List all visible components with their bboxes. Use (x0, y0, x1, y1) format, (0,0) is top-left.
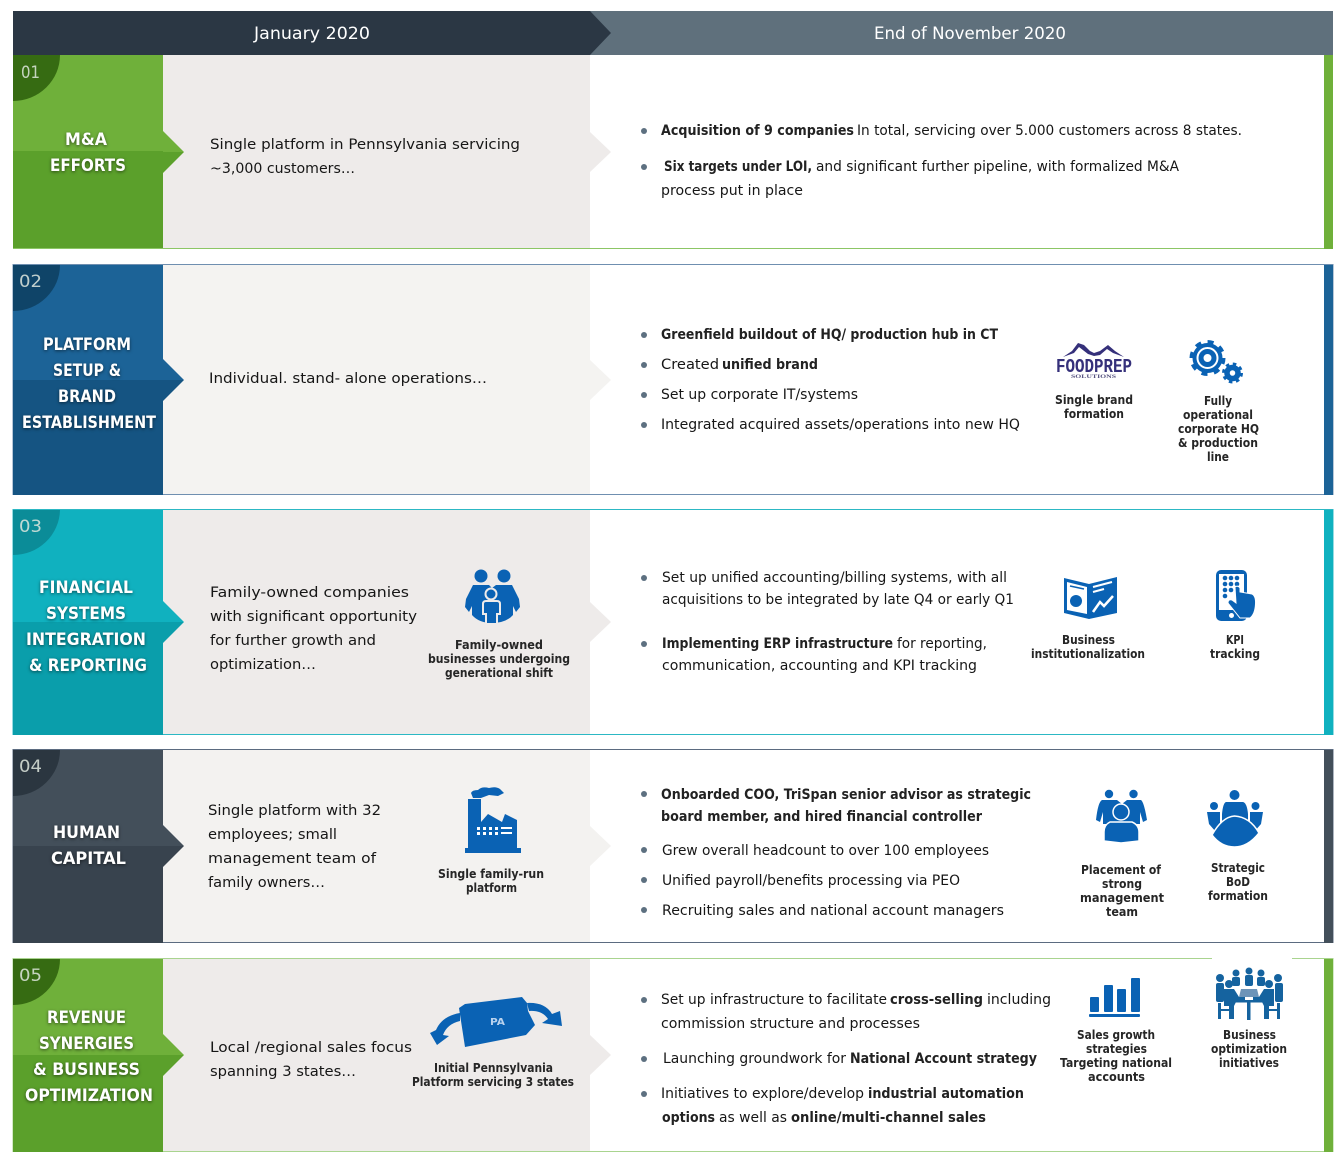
November bullets: Created (661, 356, 719, 373)
January panel: Individual. stand- alone operations… (209, 370, 487, 387)
caption: family-owned businesses: generational shift (445, 665, 553, 680)
caption: initial Pennsylvania platform: Platform servicing 3 states (412, 1074, 574, 1089)
caption: initial Pennsylvania platform: Initial Pennsylvania (434, 1060, 553, 1075)
January panel: family owners… (208, 874, 325, 891)
January panel: Single platform with 32 (208, 802, 381, 819)
row 01: M&A efforts (13, 55, 1333, 249)
caption: sales growth strategies (1060, 1027, 1172, 1084)
caption: placement of strong management team: management (1080, 890, 1164, 905)
January panel: Family-owned companies (210, 584, 409, 601)
label block: CAPITAL (51, 849, 126, 869)
November bullets: Implementing ERP infrastructure (662, 635, 893, 652)
caption: single brand formation (1055, 392, 1133, 421)
caption: placement of strong management team (1080, 862, 1164, 919)
icon: family (465, 570, 520, 624)
caption: family-owned businesses: Family-owned (455, 637, 543, 652)
January panel: management team of (208, 850, 377, 867)
caption: business optimization initiatives: optimization (1211, 1041, 1287, 1056)
November bullets: Greenfield buildout of HQ/ production hub in CT (661, 326, 998, 343)
January panel (163, 55, 611, 248)
icon: business report (1064, 577, 1117, 619)
icon: Pennsylvania map with arrows (430, 997, 562, 1047)
icon: FoodPrep logo: FOODPREP (1056, 356, 1132, 378)
January panel: for further growth and (210, 632, 376, 649)
January panel: Local /regional sales focus (210, 1039, 412, 1056)
header bar (13, 11, 1333, 55)
label block (13, 265, 163, 495)
January panel (163, 959, 611, 1151)
row 03: financial systems integration and reporting (13, 510, 1333, 735)
caption: KPI tracking: tracking (1210, 646, 1260, 661)
label block: 03 (19, 517, 42, 537)
caption: sales growth strategies: Targeting national (1060, 1055, 1172, 1070)
November bullets: communication, accounting and KPI tracking (662, 657, 977, 674)
caption: single family-run platform: platform (466, 880, 517, 895)
icon: bar chart (1089, 978, 1140, 1017)
icon: gears (1192, 342, 1242, 382)
November bullets: for reporting, (897, 635, 987, 652)
caption: fully operational HQ (1178, 393, 1259, 464)
November bullets: commission structure and processes (661, 1015, 920, 1032)
label block: SETUP & (53, 361, 121, 381)
January panel (163, 510, 611, 734)
icon: meeting table (1216, 968, 1283, 1020)
label block: M&A (65, 130, 108, 150)
January panel (163, 750, 611, 942)
November bullets: Unified payroll/benefits processing via PEO (662, 872, 960, 889)
caption: strategic BoD formation: BoD (1226, 874, 1250, 889)
November bullets: including (987, 991, 1051, 1008)
label block (13, 750, 163, 943)
caption: strategic BoD formation: Strategic (1211, 860, 1265, 875)
January panel: ~3,000 customers… (210, 160, 355, 177)
January panel: employees; small (208, 826, 337, 843)
November bullets (641, 991, 1051, 1126)
row 02: platform setup and brand establishment (13, 264, 1333, 495)
November bullets: and significant further pipeline, with formalized M&A (816, 158, 1179, 175)
icon: Pennsylvania map with arrows: PA (490, 1017, 506, 1028)
icon: FoodPrep logo: SOLUTIONS (1071, 375, 1116, 380)
November bullets: Launching groundwork for (663, 1050, 846, 1067)
January panel (163, 265, 611, 494)
label block: HUMAN (53, 823, 120, 843)
November bullets: board member, and hired financial controller (661, 808, 983, 825)
caption: initial Pennsylvania platform (412, 1060, 574, 1089)
November bullets: process put in place (661, 182, 803, 199)
November bullets: Set up unified accounting/billing systems, with all (662, 569, 1007, 586)
caption: fully operational HQ: Fully (1204, 393, 1232, 408)
label block: SYSTEMS (46, 604, 126, 624)
caption: fully operational HQ: corporate HQ (1178, 421, 1259, 436)
caption: strategic BoD formation (1208, 860, 1268, 903)
November bullets: Initiatives to explore/develop (661, 1085, 864, 1102)
caption: single family-run platform: Single family-run (438, 866, 544, 881)
November bullets (641, 569, 1014, 674)
January panel: Single platform in Pennsylvania servicing (210, 136, 520, 153)
November bullets: In total, servicing over 5.000 customers across 8 states. (857, 122, 1242, 139)
label block: BRAND (58, 387, 116, 407)
label block: & BUSINESS (33, 1060, 140, 1080)
row 05: revenue synergies and business optimization (13, 955, 1333, 1152)
November bullets: Grew overall headcount to over 100 employees (662, 842, 989, 859)
icon: board of directors (1207, 790, 1263, 847)
label block (13, 959, 163, 1152)
icon: tablet with hand (1216, 570, 1256, 621)
November bullets: online/multi-channel sales (791, 1109, 986, 1126)
November bullets: acquisitions to be integrated by late Q4 or early Q1 (662, 591, 1014, 608)
caption: business institutionalization: Business (1062, 632, 1115, 647)
caption: single brand formation: formation (1064, 406, 1124, 421)
November bullets: Recruiting sales and national account managers (662, 902, 1004, 919)
November bullets (641, 326, 1020, 433)
icon: FoodPrep logo (1056, 343, 1132, 380)
caption: family-owned businesses (428, 637, 570, 680)
label block: SYNERGIES (39, 1034, 134, 1054)
November bullets (641, 786, 1031, 919)
caption: KPI tracking: KPI (1226, 632, 1244, 647)
caption: sales growth strategies: accounts (1088, 1069, 1145, 1084)
caption: fully operational HQ: line (1207, 449, 1229, 464)
caption: sales growth strategies: Sales growth (1077, 1027, 1155, 1042)
November bullets: cross-selling (890, 991, 983, 1008)
label block: INTEGRATION (26, 630, 146, 650)
November bullets: Set up infrastructure to facilitate (661, 991, 887, 1008)
November bullets (641, 122, 1242, 199)
icon: factory (465, 787, 521, 853)
January panel: spanning 3 states… (210, 1063, 356, 1080)
label block: 04 (19, 757, 42, 777)
label block: 01 (21, 63, 40, 83)
caption: business optimization initiatives: initiatives (1219, 1055, 1279, 1070)
caption: business optimization initiatives: Business (1223, 1027, 1276, 1042)
caption: placement of strong management team: Placement of (1081, 862, 1162, 877)
November bullets: Six targets under LOI, (664, 158, 812, 175)
caption: business institutionalization (1031, 632, 1145, 661)
label block: REVENUE (47, 1008, 126, 1028)
caption: strategic BoD formation: formation (1208, 888, 1268, 903)
caption: sales growth strategies: strategies (1086, 1041, 1147, 1056)
label block: EFFORTS (50, 156, 126, 176)
label block: & REPORTING (29, 656, 147, 676)
November bullets: Set up corporate IT/systems (661, 386, 858, 403)
label block (13, 55, 163, 248)
November bullets: industrial automation (868, 1085, 1024, 1102)
November bullets: Acquisition of 9 companies (661, 122, 854, 139)
caption: business institutionalization: institutionalization (1031, 646, 1145, 661)
caption: single family-run platform (438, 866, 544, 895)
header: End of November 2020: End of November 2020 (874, 24, 1066, 44)
icon: management team (1096, 790, 1147, 843)
label block: PLATFORM (43, 335, 131, 355)
caption: KPI tracking (1210, 632, 1260, 661)
row 04: human capital (13, 750, 1333, 943)
caption: placement of strong management team: strong (1102, 876, 1142, 891)
label block: 02 (19, 272, 42, 292)
caption: placement of strong management team: team (1106, 904, 1138, 919)
label block: OPTIMIZATION (25, 1086, 153, 1106)
header: January 2020: January 2020 (253, 24, 370, 44)
November bullets: Onboarded COO, TriSpan senior advisor as strategic (661, 786, 1031, 803)
November bullets: options (662, 1109, 715, 1126)
caption: fully operational HQ: operational (1183, 407, 1253, 422)
label block: FINANCIAL (39, 578, 133, 598)
November bullets: as well as (719, 1109, 787, 1126)
caption: business optimization initiatives (1211, 1027, 1287, 1070)
label block: ESTABLISHMENT (22, 413, 156, 433)
November bullets: unified brand (722, 356, 818, 373)
January panel: with significant opportunity (210, 608, 417, 625)
caption: fully operational HQ: & production (1178, 435, 1258, 450)
caption: single brand formation: Single brand (1055, 392, 1133, 407)
label block (13, 510, 163, 735)
November bullets: National Account strategy (850, 1050, 1037, 1067)
January panel: optimization… (210, 656, 316, 673)
label block: 05 (19, 966, 42, 986)
caption: family-owned businesses: businesses undergoing (428, 651, 570, 666)
November bullets: Integrated acquired assets/operations into new HQ (661, 416, 1020, 433)
